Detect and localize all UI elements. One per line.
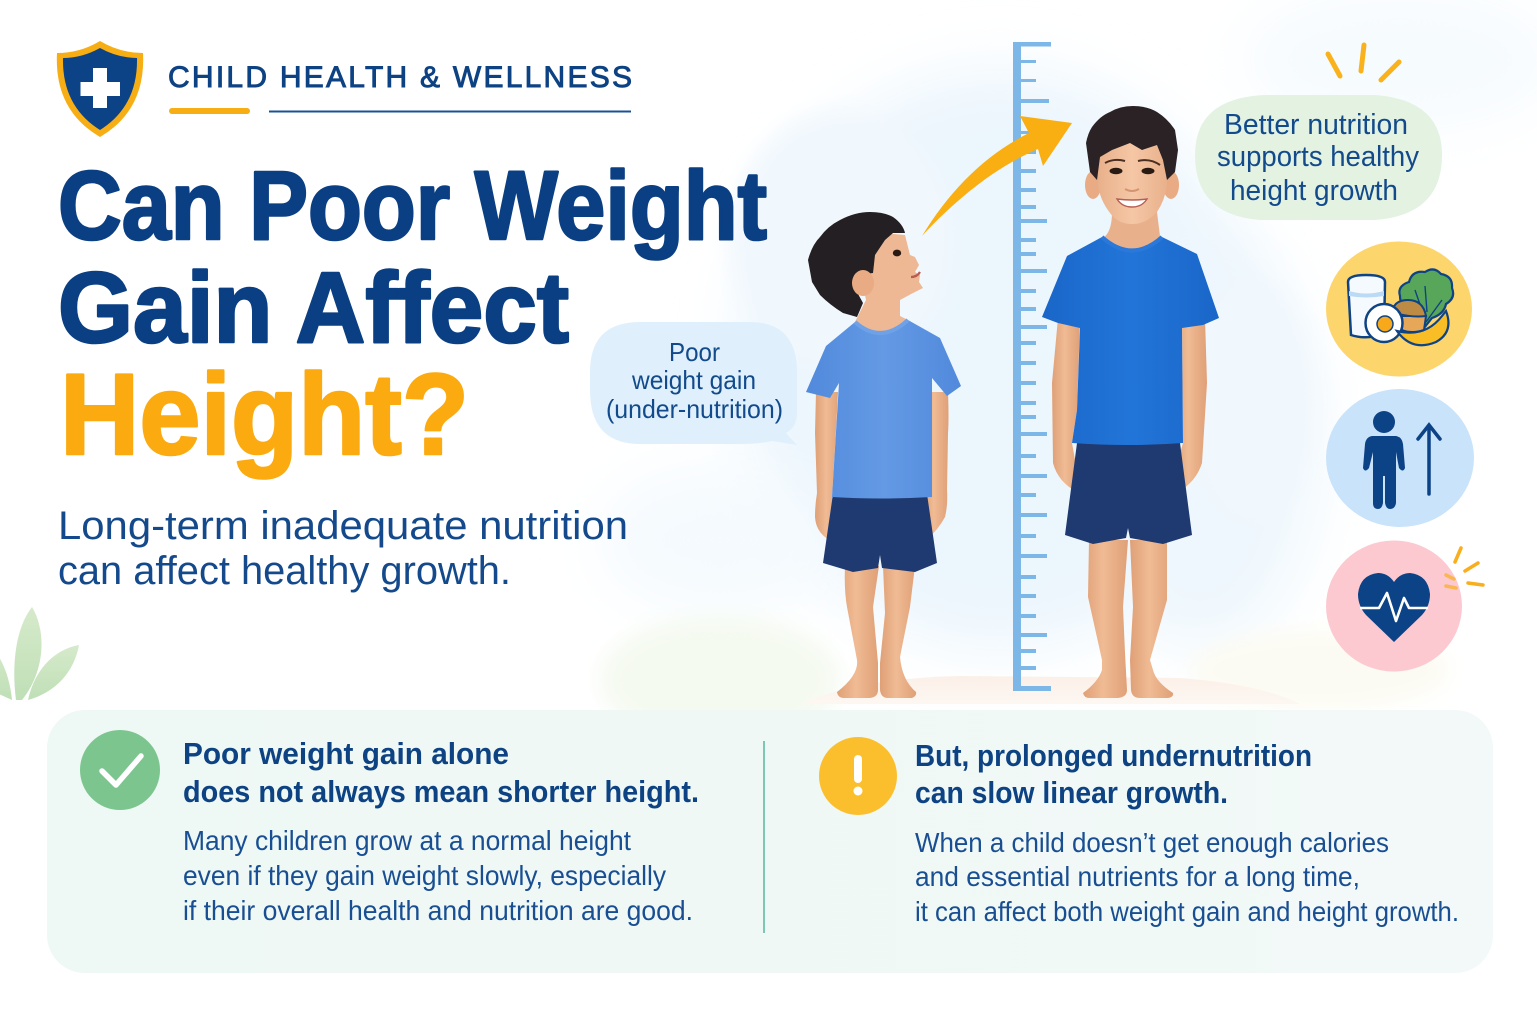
neck and face	[855, 232, 923, 333]
decorative leaves	[0, 607, 79, 700]
background: soft colour wash	[600, 0, 1537, 745]
title: Height?	[60, 351, 469, 479]
t-shirt	[806, 320, 961, 498]
collar	[1102, 237, 1162, 250]
nose	[1125, 189, 1139, 191]
legs and feet	[837, 566, 916, 698]
icon: check mark	[80, 730, 160, 810]
banana	[1397, 311, 1448, 345]
collar	[855, 320, 908, 333]
right body text: it can affect both weight gain and height growth.	[915, 896, 1459, 927]
shorter child	[806, 212, 961, 698]
right heading: But, prolonged undernutrition	[915, 738, 1312, 773]
logo: shield with cross	[57, 41, 143, 137]
left column: reassurance	[80, 730, 699, 926]
subtitle: Long-term inadequate nutrition	[58, 504, 628, 548]
arms and hands	[1052, 318, 1207, 492]
right heading: can slow linear growth.	[915, 775, 1228, 810]
icon: height growth	[1326, 389, 1474, 527]
left body text: if their overall health and nutrition are good.	[183, 895, 693, 926]
speech bubble: poor weight gain	[590, 322, 797, 445]
left body text: even if they gain weight slowly, especially	[183, 860, 666, 891]
icon: exclamation	[819, 737, 897, 815]
subtitle	[58, 504, 628, 593]
heart	[1358, 573, 1430, 642]
right body text	[915, 827, 1459, 927]
smile	[1117, 199, 1147, 207]
legs and feet	[1083, 540, 1173, 698]
face	[1097, 140, 1168, 224]
icon: heart health	[1326, 540, 1483, 672]
up arrow	[1418, 425, 1440, 494]
left heading: does not always mean shorter height.	[183, 774, 699, 809]
sparkle rays above bubble	[1328, 45, 1399, 80]
growth arrow	[922, 116, 1072, 236]
speech bubble: poor weight gain: weight gain	[631, 365, 756, 395]
speech bubble: better nutrition	[1195, 95, 1442, 220]
speech bubble: better nutrition: height growth	[1230, 175, 1398, 207]
glass of milk	[1348, 275, 1385, 337]
neck	[1103, 212, 1162, 250]
egg	[1366, 304, 1402, 342]
title	[58, 151, 767, 479]
t-shirt	[1042, 237, 1219, 445]
right body text: and essential nutrients for a long time,	[915, 861, 1360, 892]
eye	[893, 250, 901, 256]
left body text: Many children grow at a normal height	[183, 825, 631, 856]
icon: healthy food	[1326, 242, 1472, 376]
floor strip	[800, 676, 1300, 704]
bottom panel	[47, 710, 1493, 973]
speech bubble: better nutrition: Better nutrition	[1224, 109, 1408, 141]
right column: warning	[819, 737, 1459, 927]
arms and hands	[815, 392, 948, 543]
person	[1363, 411, 1405, 509]
taller child	[1042, 106, 1219, 698]
speech bubble: poor weight gain: (under-nutrition)	[606, 394, 783, 424]
height ruler	[1013, 42, 1051, 691]
speech bubble: better nutrition: supports healthy	[1217, 141, 1419, 173]
hair	[1086, 106, 1178, 180]
left heading: Poor weight gain alone	[183, 736, 509, 771]
left heading	[183, 736, 699, 809]
ears	[1085, 171, 1179, 199]
right body text: When a child doesn’t get enough calories	[915, 827, 1389, 858]
title: Can Poor Weight	[58, 151, 767, 260]
speech bubble: poor weight gain: Poor	[669, 337, 720, 367]
right heading	[915, 738, 1312, 810]
sparkle rays	[1446, 548, 1483, 588]
eyes	[1110, 168, 1154, 174]
subtitle: can affect healthy growth.	[58, 549, 511, 593]
eyebrows	[1105, 160, 1160, 165]
hair	[808, 212, 905, 317]
mouth	[911, 272, 920, 277]
muffin	[1392, 300, 1426, 332]
ear	[852, 270, 874, 296]
shorts	[1065, 443, 1192, 544]
left body text	[183, 825, 693, 926]
brand label: CHILD HEALTH & WELLNESS	[168, 61, 632, 94]
pulse line	[1360, 593, 1428, 621]
lettuce	[1399, 269, 1453, 328]
title: Gain Affect	[58, 252, 569, 364]
shorts	[823, 494, 937, 572]
brand underline	[169, 108, 631, 114]
